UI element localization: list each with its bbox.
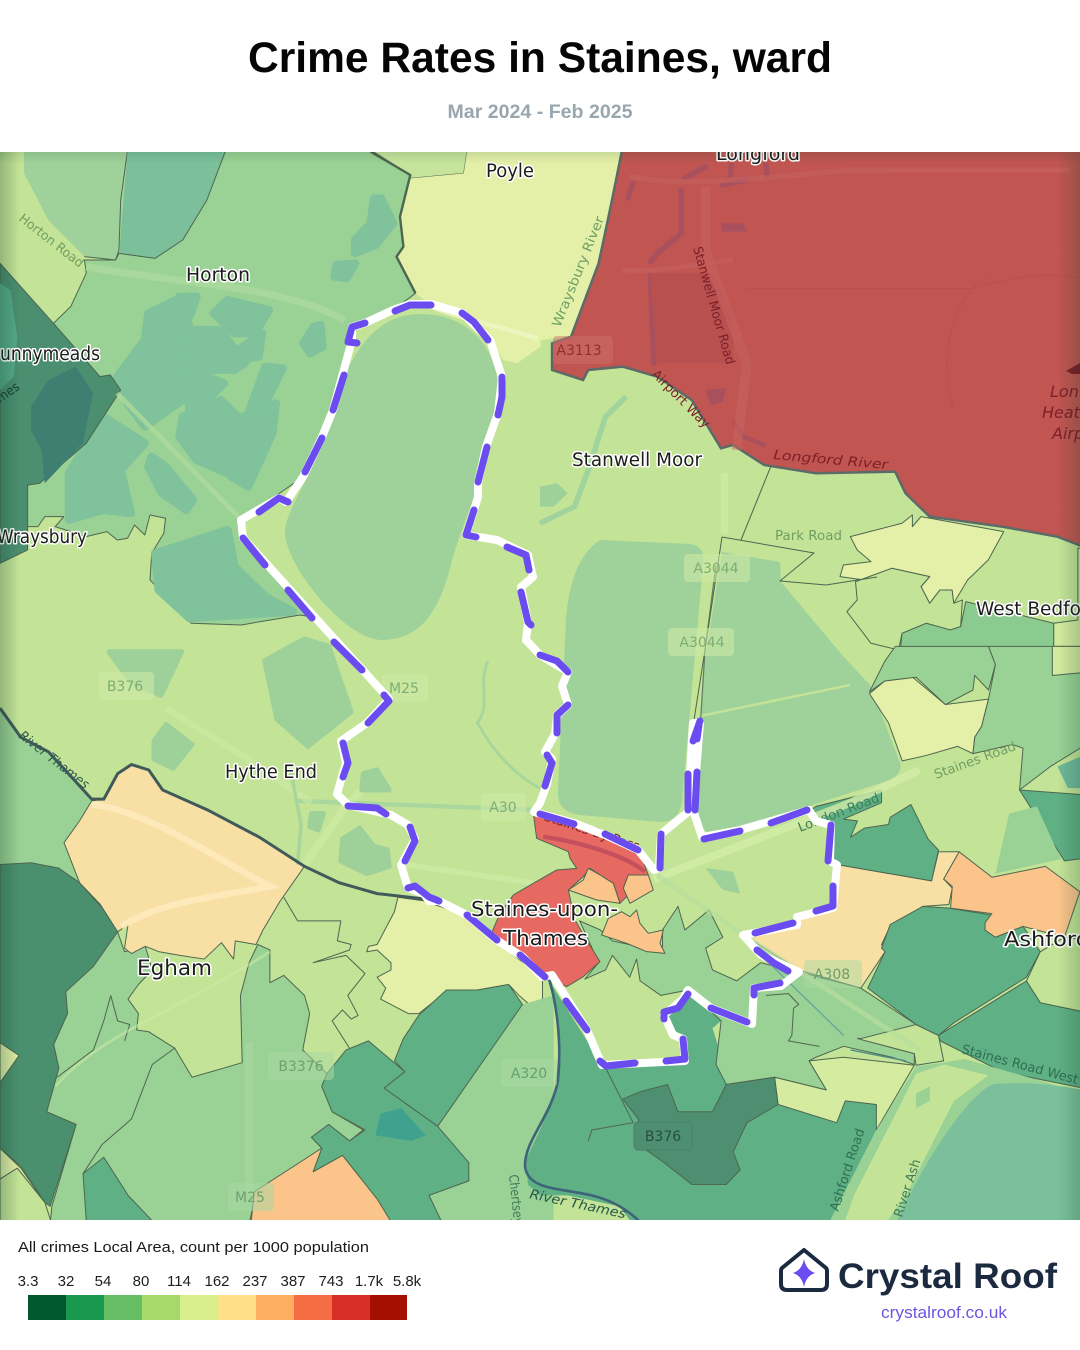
legend values: 114 <box>167 1273 191 1290</box>
road and river names: Airport Way <box>648 367 713 432</box>
road and river names: Lon <box>1050 382 1079 401</box>
Staines town centre high-crime areas <box>490 813 665 987</box>
road and river names: River Ash <box>892 1158 924 1219</box>
road shields: B376 <box>107 679 143 695</box>
road and river names: Chertsey <box>505 1174 525 1225</box>
place labels: Poyle <box>486 161 534 182</box>
road shields: M25 <box>389 681 419 697</box>
legend colour scale <box>28 1295 407 1320</box>
logo wordmark: Crystal Roof <box>838 1257 1057 1296</box>
title: Crime Rates in Staines, ward <box>248 34 832 82</box>
place labels: unnymeads <box>0 344 100 365</box>
boundary purple dashes <box>243 305 833 1066</box>
road and river names: Horton Road <box>16 211 86 271</box>
website: crystalroof.co.uk <box>881 1304 1008 1322</box>
road and river names: London Road <box>796 791 882 836</box>
road shields: A3044 <box>679 635 725 651</box>
road and river names: Longford River <box>773 448 890 473</box>
north-west regions <box>0 150 541 625</box>
legend values: 1.7k <box>355 1273 384 1290</box>
road and river names <box>0 211 1080 1225</box>
legend values: 32 <box>58 1273 74 1290</box>
legend values: 54 <box>95 1273 111 1290</box>
road shields: A320 <box>511 1066 547 1082</box>
road and river names: River Thames <box>528 1187 627 1222</box>
road and river names: River Thames <box>16 728 92 793</box>
road shields: A3044 <box>693 561 739 577</box>
road and river names: Staines By-Pass <box>542 810 642 855</box>
road shields: B3376 <box>278 1059 324 1075</box>
road and river names: Park Road <box>775 529 842 544</box>
legend values: 387 <box>280 1273 306 1290</box>
legend title: All crimes Local Area, count per 1000 population <box>18 1239 369 1256</box>
legend values: 743 <box>318 1273 344 1290</box>
map edge shading <box>0 152 1080 1220</box>
icon: airport plane <box>1066 363 1080 374</box>
road and river names: Ashford Road <box>828 1127 868 1213</box>
place labels: Horton <box>186 265 250 286</box>
road and river names: Staines Road <box>932 739 1018 783</box>
legend values: 237 <box>242 1273 268 1290</box>
boundary white underlay <box>241 304 837 1065</box>
place labels: Staines-upon- <box>471 897 618 921</box>
river Thames south of Staines <box>525 975 640 1222</box>
icon: purple sparkle <box>793 1259 815 1287</box>
legend values: 162 <box>204 1273 230 1290</box>
road shields: A30 <box>489 800 517 816</box>
road shields: A3113 <box>556 343 602 359</box>
road shields <box>99 336 862 1211</box>
road shields: A308 <box>814 967 850 983</box>
legend values: 3.3 <box>18 1273 38 1290</box>
subtitle: Mar 2024 - Feb 2025 <box>448 102 633 123</box>
road and river names: Staines Road West <box>960 1042 1080 1088</box>
place labels: West Bedfo <box>976 599 1080 620</box>
place labels <box>0 144 1080 981</box>
ward boundary <box>241 304 837 1066</box>
road shields: M25 <box>235 1190 265 1206</box>
road shields: B376 <box>645 1129 681 1145</box>
legend values: 5.8k <box>393 1273 422 1290</box>
road and river names: Wraysbury River <box>550 214 608 329</box>
south-west regions <box>0 639 554 1232</box>
place labels: Egham <box>137 956 212 981</box>
map base <box>0 152 1080 1220</box>
legend <box>18 1239 422 1320</box>
place labels: Stanwell Moor <box>572 450 702 471</box>
reservoirs <box>285 314 901 835</box>
road and river names: Heat <box>1042 403 1080 422</box>
legend values: 80 <box>133 1273 149 1290</box>
place labels: Longford <box>716 144 800 165</box>
road and river names: Stanwell Moor Road <box>689 245 737 366</box>
legend values <box>18 1273 422 1290</box>
icon: house outline <box>781 1250 827 1290</box>
north-east regions <box>540 147 1080 650</box>
logo: Crystal Roof <box>781 1250 1057 1322</box>
place labels: Thames <box>502 926 588 950</box>
south-east regions <box>526 646 1080 1224</box>
place labels: Hythe End <box>225 762 317 783</box>
